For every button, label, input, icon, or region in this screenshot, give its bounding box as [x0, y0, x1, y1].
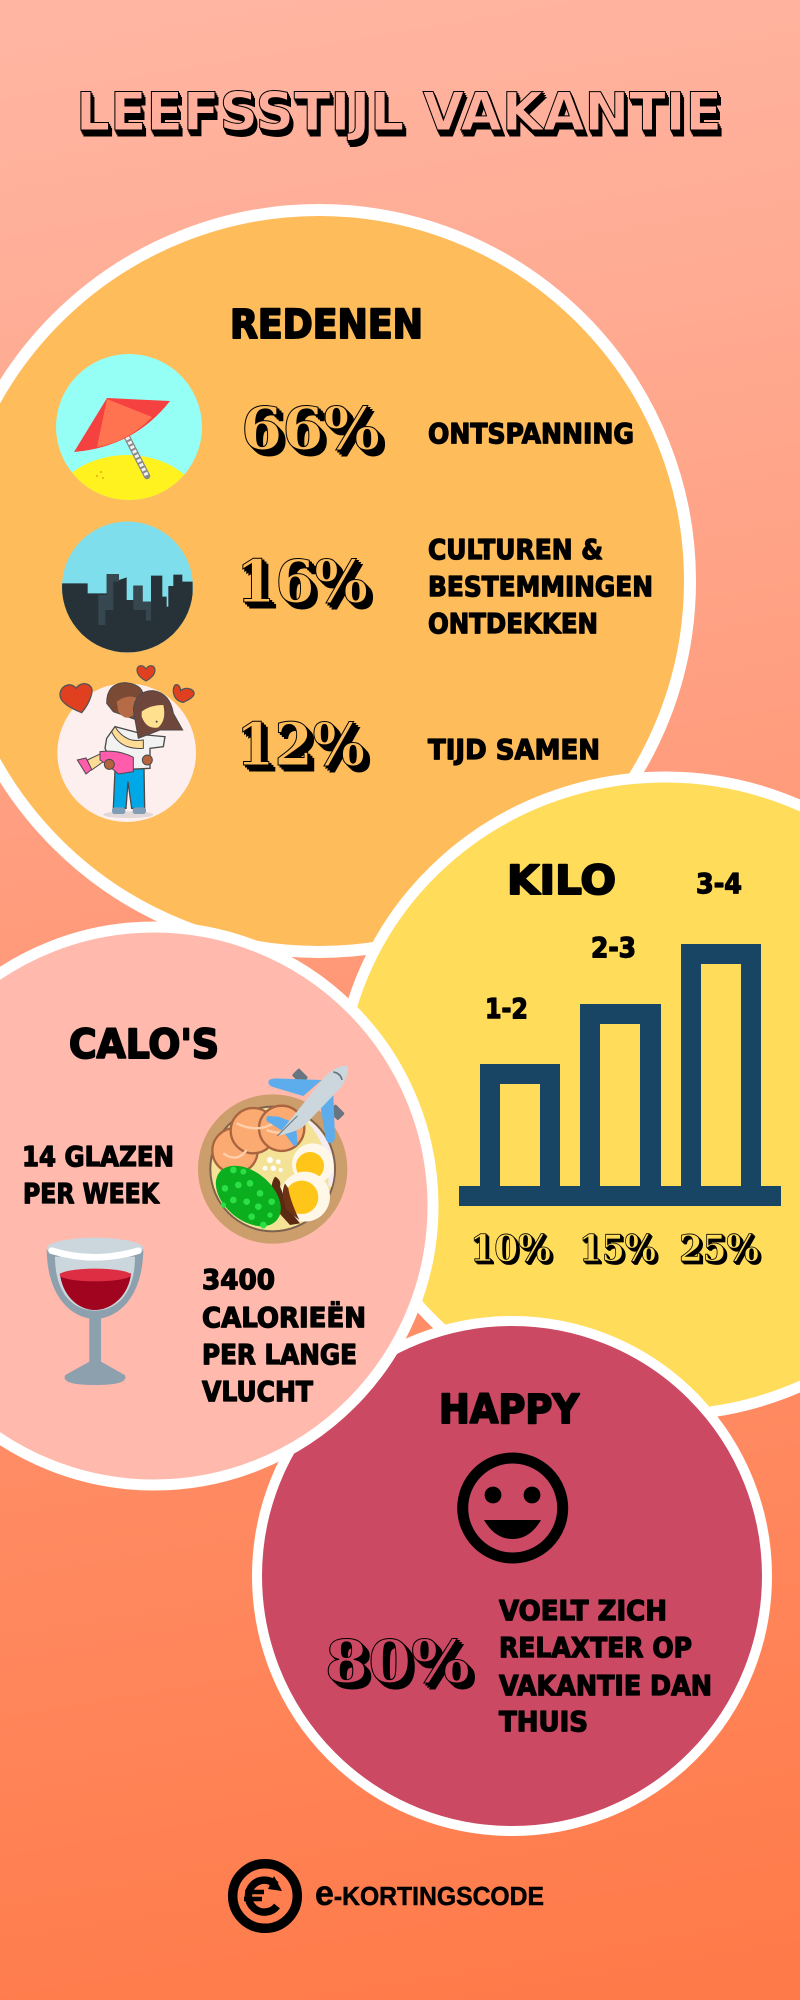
- label: 14 glazen per week: PER WEEK: [23, 1179, 161, 1210]
- label: voelt zich relaxter: RELAXTER OP: [499, 1633, 692, 1664]
- label: 3400 calorieen per lange vlucht: VLUCHT: [202, 1377, 313, 1408]
- label: 14 glazen per week: [22, 1142, 174, 1210]
- stat: 12%: 12%: [236, 710, 365, 779]
- panel: redenen: [0, 210, 690, 952]
- panel: happy: [257, 1321, 767, 1831]
- label: tijd samen: TIJD SAMEN: [428, 735, 600, 766]
- bar label: 2-3: 2-3: [591, 933, 636, 964]
- bar chart: [459, 944, 781, 1206]
- icon: smiley: [463, 1458, 563, 1558]
- label: 3400 calorieen per lange vlucht: 3400: [202, 1265, 275, 1296]
- panel: calo's: [0, 927, 433, 1485]
- stat: 80%: 80%: [325, 1627, 470, 1696]
- icon: ramen bowl: [198, 1094, 347, 1244]
- stat: 16%: 16%: [236, 547, 368, 616]
- label: culturen en bestemmingen ontdekken: ONTDEKKEN: [428, 609, 598, 640]
- label: voelt zich relaxter: THUIS: [499, 1707, 588, 1738]
- label: culturen en bestemmingen ontdekken: [428, 535, 653, 640]
- icon: couple with hearts: [57, 683, 196, 822]
- panel: kilo: [338, 777, 800, 1415]
- icon: heart top: [137, 666, 155, 681]
- label: voelt zich relaxter: [499, 1596, 712, 1738]
- label: voelt zich relaxter: VAKANTIE DAN: [499, 1671, 712, 1702]
- heading: kilo: KILO: [507, 858, 616, 904]
- label: 3400 calorieen per lange vlucht: PER LANGE: [202, 1340, 357, 1371]
- heading: happy: HAPPY: [439, 1387, 580, 1433]
- icon: euro coin: [233, 1864, 297, 1928]
- title: LEEFSSTIJL VAKANTIE: [76, 82, 722, 143]
- panel circle: redenen: [0, 210, 690, 952]
- icon: airplane: [266, 1066, 348, 1146]
- stat: 25%: 25%: [679, 1228, 759, 1270]
- heading: redenen: REDENEN: [230, 302, 423, 348]
- logo: [233, 1864, 544, 1928]
- wordmark: e-KORTINGSCODE: [315, 1874, 544, 1913]
- icon: beach umbrella: [56, 354, 202, 500]
- stat: 15%: 15%: [579, 1228, 656, 1270]
- panel circle: kilo: [338, 777, 800, 1415]
- label: 3400 calorieen per lange vlucht: CALORIEËN: [202, 1302, 366, 1334]
- label: culturen en bestemmingen ontdekken: BESTEMMINGEN: [428, 572, 653, 603]
- label: voelt zich relaxter: VOELT ZICH: [499, 1596, 667, 1627]
- icon: heart large: [60, 684, 92, 713]
- label: 3400 calorieen per lange vlucht: [202, 1265, 366, 1408]
- stat: 10%: 10%: [470, 1228, 551, 1270]
- icon: city skyline: [62, 522, 193, 652]
- label: culturen en bestemmingen ontdekken: CULTUREN &: [428, 535, 603, 566]
- stat: 66%: 66%: [241, 394, 380, 463]
- bar label: 1-2: 1-2: [485, 994, 528, 1025]
- label: 14 glazen per week: 14 GLAZEN: [22, 1142, 174, 1173]
- panel circle: calo's: [0, 927, 433, 1485]
- bar label: 3-4: 3-4: [696, 869, 742, 900]
- label: ontspanning: ONTSPANNING: [428, 419, 634, 450]
- icon: wine glass: [47, 1238, 143, 1385]
- icon: heart right: [173, 685, 194, 702]
- heading: calo's: CALO'S: [69, 1022, 219, 1068]
- panel circle: happy: [257, 1321, 767, 1831]
